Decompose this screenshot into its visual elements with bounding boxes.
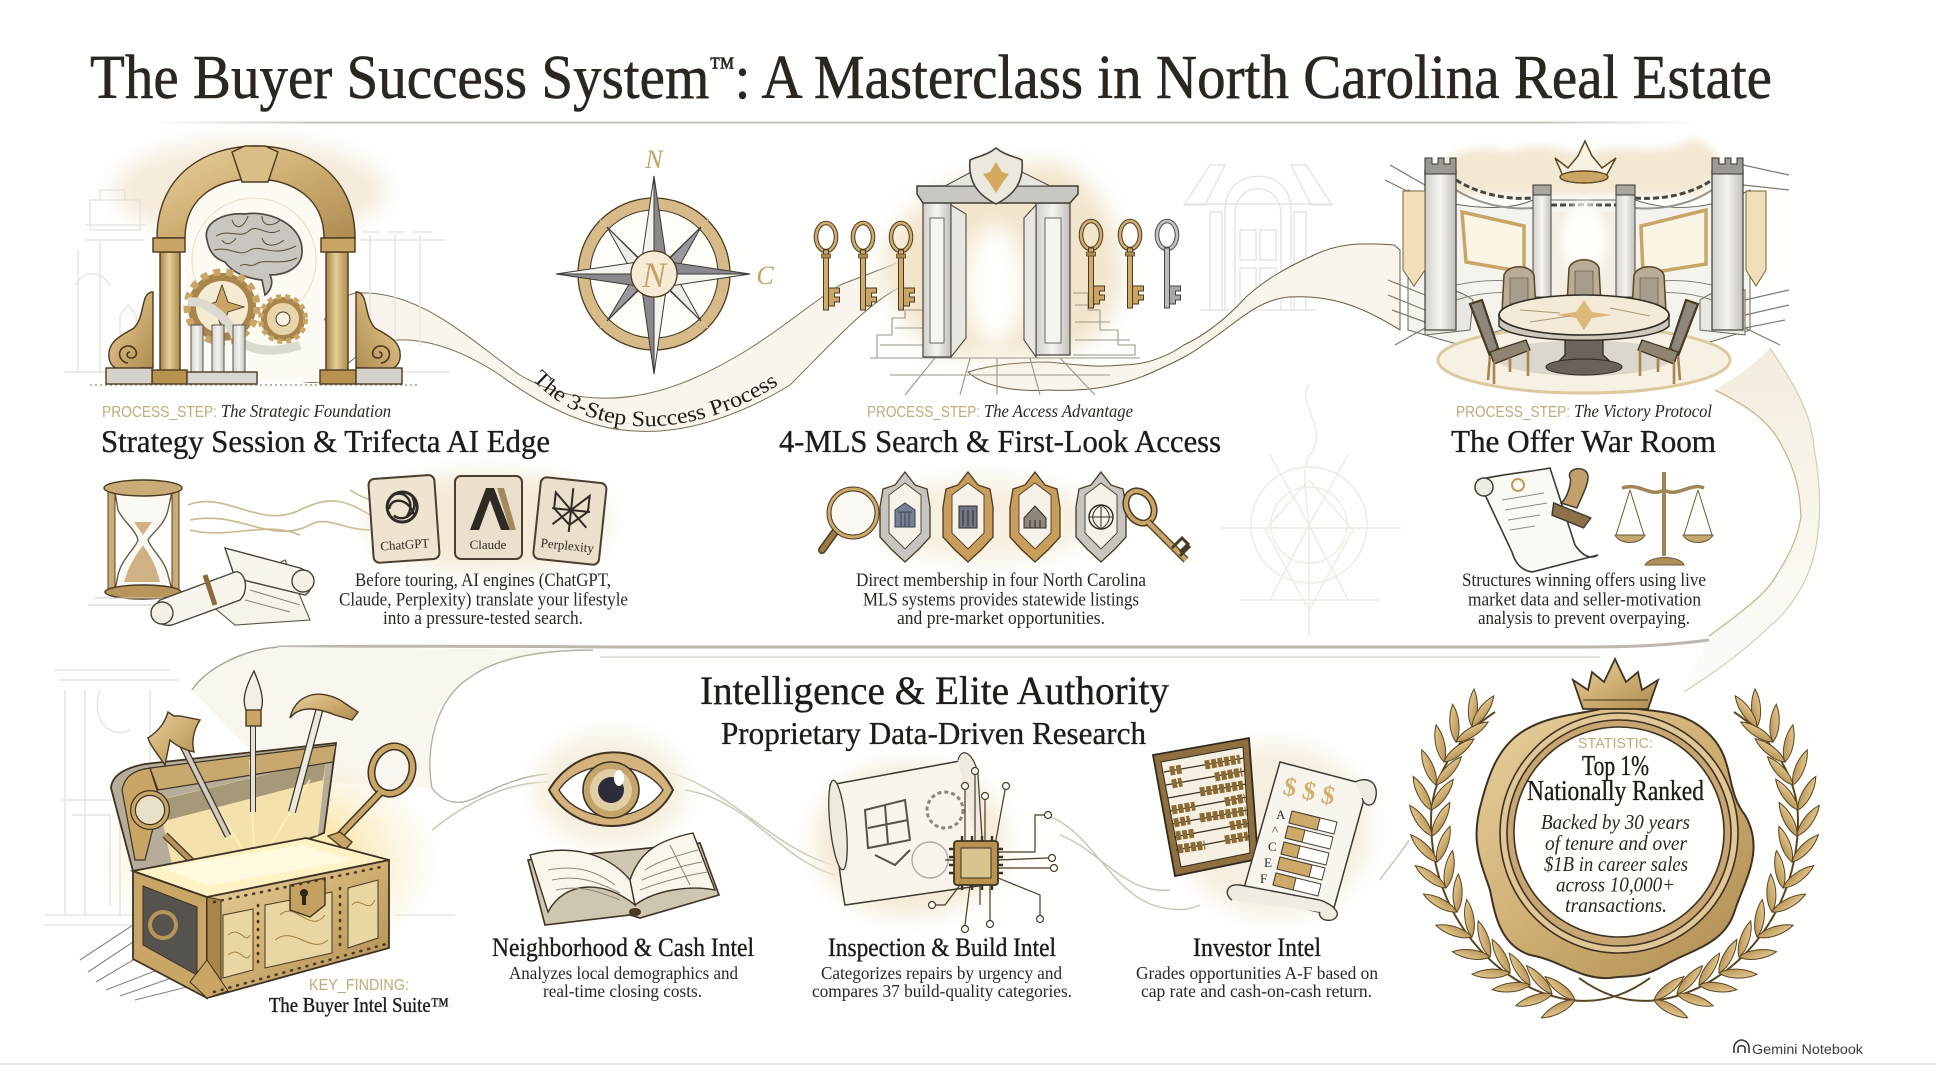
tower left	[1425, 170, 1456, 330]
ribbon: arch to door	[262, 262, 905, 431]
front chairs	[1470, 300, 1698, 384]
banner label: The 3-Step Success Process	[534, 369, 777, 429]
ribbon: horizontal band and curve into chest	[192, 640, 1709, 910]
step 1 heading: Strategy Session & Trifecta AI Edge	[101, 423, 550, 459]
laurel wreath	[1406, 689, 1823, 1022]
step 2 label	[867, 401, 1133, 421]
statistic text: Top 1%	[1582, 751, 1649, 782]
icon: open book	[528, 833, 719, 925]
key finding label: The Buyer Intel Suite™	[269, 993, 449, 1017]
background ghost architecture: entrance door	[1184, 165, 1332, 310]
icon: ledger scroll: $ $ $	[1281, 772, 1338, 811]
icon: axe	[148, 712, 228, 836]
illustration: door with keys and shield	[816, 148, 1180, 395]
compass rose: N	[641, 255, 668, 295]
step 2 body	[856, 571, 1146, 629]
icon: ledger scroll: ^	[1272, 823, 1278, 838]
compass rose	[556, 145, 774, 374]
card: neighborhood & cash intel	[492, 933, 754, 1001]
card: ChatGPT	[368, 475, 440, 563]
title: The Buyer Success System	[90, 44, 763, 112]
card: ChatGPT: ChatGPT	[380, 535, 430, 554]
icon: ledger scroll: E	[1264, 855, 1272, 870]
step 2 body: and pre-market opportunities.	[897, 609, 1105, 629]
statistic text	[1527, 735, 1704, 917]
illustration: blueprint and chip	[815, 753, 1058, 932]
illustration: magnifier, MLS shields and key	[822, 472, 1190, 562]
icon: ledger scroll: F	[1260, 871, 1267, 886]
compass rose: N	[644, 145, 664, 174]
step 2 label: The Access Advantage	[984, 401, 1133, 421]
step 1 body: into a pressure-tested search.	[383, 609, 583, 629]
statistic text: Nationally Ranked	[1527, 776, 1704, 807]
icon: document and stamp	[1475, 468, 1598, 572]
step 1 body: Claude, Perplexity) translate your lifestyle	[339, 590, 628, 610]
illustration: offer war room	[1385, 140, 1789, 393]
icon: small gear	[260, 296, 306, 342]
card: inspection & build intel: Inspection & Build Intel	[828, 933, 1056, 962]
step 1 body	[339, 571, 628, 629]
illustration: brain gears arch	[65, 142, 450, 385]
step 3 body: Structures winning offers using live	[1462, 571, 1706, 591]
card: neighborhood & cash intel: Analyzes local demographics and	[509, 963, 738, 983]
title: : A Masterclass in North Carolina Real Estate	[735, 44, 1772, 112]
statistic text: across 10,000+	[1556, 872, 1675, 896]
step 3 label: PROCESS_STEP:	[1456, 404, 1570, 421]
icon: crown	[1573, 659, 1658, 709]
step 3 body	[1462, 571, 1706, 629]
icon: hammer	[290, 694, 358, 812]
blueprint scroll	[825, 753, 985, 905]
title: ™	[709, 52, 735, 83]
card: neighborhood & cash intel: Neighborhood & Cash Intel	[492, 933, 754, 962]
icon: ledger scroll	[1227, 762, 1376, 920]
icon: scrolls	[151, 548, 314, 625]
step 1 label	[102, 401, 391, 421]
footer logo: Gemini Notebook	[1752, 1042, 1863, 1057]
icon: brush	[244, 671, 262, 812]
step 3 heading: The Offer War Room	[1451, 423, 1716, 459]
card: inspection & build intel: compares 37 build-quality categories.	[812, 981, 1072, 1001]
tower right	[1712, 170, 1743, 330]
icon: large gear	[187, 272, 257, 342]
icon: crown	[1555, 141, 1616, 183]
illustration: hourglass and scrolls	[88, 480, 370, 625]
step 3 label	[1456, 401, 1712, 421]
step 2 label: PROCESS_STEP:	[867, 404, 980, 421]
step 1 label: The Strategic Foundation	[221, 401, 391, 421]
icon: shield	[970, 148, 1022, 204]
banners	[1403, 191, 1425, 286]
card: Claude: Claude	[470, 537, 507, 552]
step 2 heading: 4-MLS Search & First-Look Access	[779, 423, 1221, 459]
card: investor intel	[1136, 933, 1378, 1001]
icon: balance scale	[1615, 472, 1713, 565]
card: neighborhood & cash intel: real-time closing costs.	[543, 981, 702, 1001]
card: investor intel: Investor Intel	[1193, 933, 1321, 962]
back chairs	[1502, 260, 1666, 312]
icon: magnifying wand	[133, 793, 219, 888]
section subheading: Proprietary Data-Driven Research	[721, 715, 1146, 751]
ribbon: right sweep from war room down to medallion	[1684, 348, 1820, 692]
card: Perplexity: Perplexity	[540, 535, 595, 556]
card: Perplexity	[533, 477, 607, 565]
icon: gold key	[1120, 486, 1190, 560]
step 1 body: Before touring, AI engines (ChatGPT,	[355, 571, 611, 591]
card: investor intel: Grades opportunities A-F based on	[1136, 963, 1378, 983]
statistic text: of tenure and over	[1545, 831, 1688, 855]
key finding label	[269, 977, 449, 1017]
icon: keys right	[1081, 221, 1180, 308]
step 2 body: Direct membership in four North Carolina	[856, 571, 1146, 591]
medallion	[1406, 659, 1823, 1022]
frames	[1462, 212, 1524, 272]
statistic text: Backed by 30 years	[1541, 810, 1690, 834]
card: investor intel: cap rate and cash-on-cash return.	[1141, 981, 1372, 1001]
statistic text: STATISTIC:	[1578, 735, 1653, 752]
step 2 body: MLS systems provides statewide listings	[863, 590, 1139, 610]
statistic text: $1B in career sales	[1544, 852, 1688, 876]
section heading: Intelligence & Elite Authority	[700, 668, 1169, 713]
compass rose: C	[756, 261, 774, 290]
icon: MLS shields	[880, 472, 1126, 562]
illustration: abacus and ledger	[1153, 738, 1376, 920]
card: inspection & build intel: Categorizes repairs by urgency and	[821, 963, 1062, 983]
illustration: eye and open book	[528, 735, 719, 925]
card: Claude	[455, 476, 522, 559]
icon: brain	[206, 213, 302, 295]
step 3 body: analysis to prevent overpaying.	[1478, 609, 1690, 629]
icon: chip	[949, 836, 1003, 890]
icon: magnifier	[822, 489, 877, 550]
icon: abacus	[1153, 738, 1258, 876]
icon: ledger scroll: C	[1268, 839, 1277, 854]
step 3 label: The Victory Protocol	[1574, 401, 1712, 421]
card: inspection & build intel	[812, 933, 1072, 1001]
ribbon: door to war room	[968, 244, 1400, 390]
icon: ledger scroll: A	[1276, 807, 1286, 822]
statistic text: transactions.	[1565, 893, 1667, 917]
step 1 label: PROCESS_STEP:	[102, 404, 217, 421]
icon: flying key	[328, 741, 419, 850]
rug	[1438, 327, 1730, 393]
key finding label: KEY_FINDING:	[309, 977, 409, 994]
AI cards	[350, 474, 608, 570]
icon: eye	[549, 752, 673, 826]
step 3 body: market data and seller-motivation	[1468, 590, 1701, 610]
circuit traces	[928, 768, 1058, 932]
icon: keys left	[816, 223, 914, 310]
illustration: treasure chest	[43, 670, 455, 1000]
background ghost compass	[1222, 385, 1401, 636]
chest body	[80, 838, 389, 1000]
table	[1499, 295, 1669, 375]
